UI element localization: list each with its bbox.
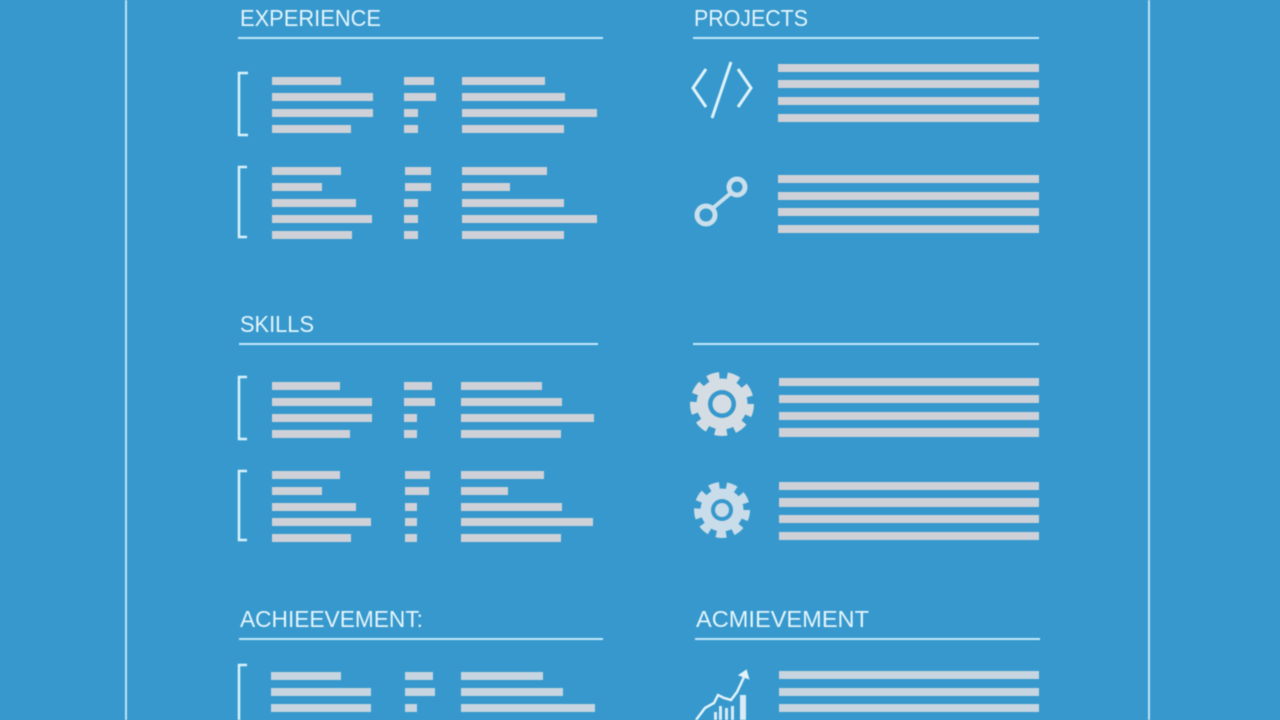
achievement text lines — [779, 671, 1039, 712]
panel: achievement right — [695, 606, 1040, 720]
heading: skills: SKILLS — [240, 311, 314, 337]
panel: skills tools — [693, 344, 1039, 540]
icon: growth chart — [696, 671, 748, 720]
heading: achievement left: ACHIEEVEMENT: — [240, 606, 423, 632]
heading: achievement right: ACMIEVEMENT — [696, 606, 869, 632]
skills entry 2 — [239, 471, 593, 542]
skills tool lines 2 — [779, 482, 1039, 540]
panel: skills — [239, 311, 598, 542]
achievement entry — [239, 665, 595, 720]
project text lines 1 — [778, 64, 1039, 122]
icon: connected nodes — [697, 179, 745, 224]
project text lines 2 — [778, 175, 1039, 233]
panel: experience — [238, 5, 603, 239]
icon: large gear — [694, 376, 750, 432]
icon: code brackets — [693, 62, 751, 118]
experience entry 1 — [239, 73, 597, 135]
skills entry 1 — [239, 377, 594, 439]
heading: experience: EXPERIENCE — [240, 5, 381, 31]
experience entry 2 — [239, 167, 597, 239]
panel: projects — [693, 5, 1039, 233]
panel: achievement left — [239, 606, 603, 720]
heading: projects: PROJECTS — [694, 5, 808, 31]
skills tool lines 1 — [779, 378, 1039, 437]
icon: small gear — [698, 486, 746, 534]
